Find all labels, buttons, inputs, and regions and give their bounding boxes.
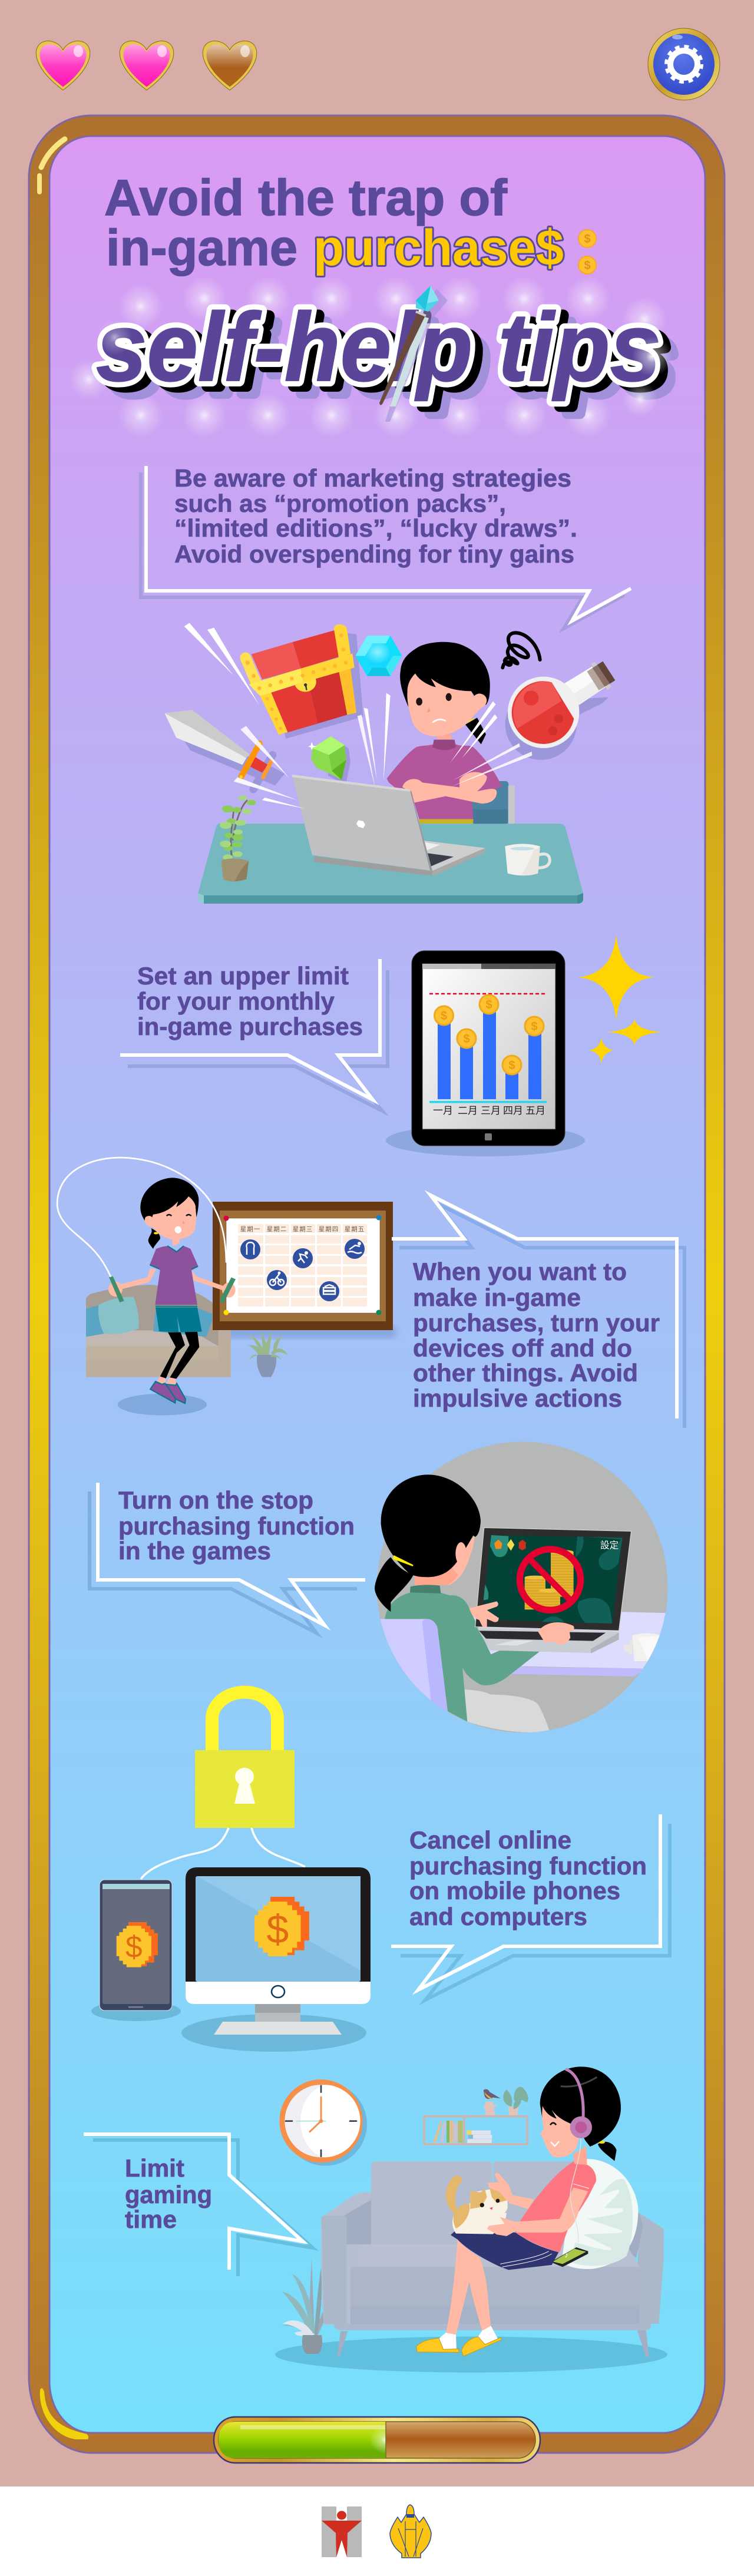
floor shadow — [275, 2336, 667, 2373]
scene: schedule board — [57, 1158, 396, 1416]
tip 2 text: Set an upper limit — [137, 962, 349, 990]
pixel coin large: $ — [266, 1907, 289, 1952]
icon: treasure chest — [246, 624, 363, 739]
life hearts — [36, 41, 257, 90]
icon: heart 2 — [120, 41, 174, 90]
icon: potted plant — [220, 795, 256, 882]
limit line — [429, 993, 547, 994]
weekday headers — [240, 1226, 365, 1233]
icon: heart 3 empty — [203, 41, 257, 90]
tip 3 text: purchases, turn your — [413, 1309, 660, 1337]
tip 6 text: time — [125, 2205, 177, 2233]
heading: self-help tips: self-help tips — [111, 305, 676, 414]
shirt — [515, 2161, 596, 2252]
tip 4 text: Turn on the stop — [118, 1486, 313, 1514]
tablet bar chart: $ — [441, 1010, 447, 1023]
heading word purchase$: purchase$ — [313, 220, 564, 276]
burst rays — [184, 623, 532, 809]
tip 3 text: other things. Avoid — [413, 1359, 638, 1387]
tip 1 text — [174, 464, 577, 568]
tip 3 text: impulsive actions — [413, 1384, 622, 1412]
shorts — [451, 2231, 558, 2270]
weekday headers: 星期二 — [267, 1226, 287, 1233]
month labels: 三月 — [481, 1105, 501, 1116]
green fill — [219, 2422, 386, 2458]
coin stacks — [551, 1552, 574, 1597]
tip 4 text — [118, 1486, 355, 1565]
coins — [435, 995, 544, 1074]
title — [104, 170, 564, 276]
tip 4 text: purchasing function — [118, 1512, 355, 1540]
icon: coin colon: $ — [584, 233, 591, 246]
icon: padlock with wires — [141, 1692, 305, 1879]
icon: blue gem — [355, 636, 402, 676]
heading line 1: Avoid the trap of — [104, 170, 507, 226]
month labels: 五月 — [525, 1105, 545, 1116]
tip 2 text: in-game purchases — [137, 1013, 363, 1040]
icon: mobile phone with coin — [91, 1880, 181, 2021]
sofa background — [86, 1285, 231, 1377]
weekday headers: 星期一 — [240, 1226, 260, 1233]
icon: red potion flask — [505, 662, 615, 760]
pixel coin small: $ — [125, 1929, 143, 1963]
icon: decorative plant — [281, 2257, 334, 2354]
month labels: 一月 — [433, 1105, 453, 1116]
tip 1 text: such as “promotion packs”, — [174, 490, 506, 517]
tip 1 speech bubble — [141, 466, 631, 629]
footer band — [0, 2486, 754, 2576]
icon: wall clock — [279, 2079, 367, 2166]
tip 6 text: Limit — [125, 2154, 184, 2182]
pixel coin large — [254, 1897, 309, 1956]
cat — [446, 2175, 462, 2214]
month labels — [433, 1105, 545, 1116]
room circle — [371, 1437, 677, 1744]
icon: floor plant — [246, 1330, 288, 1377]
tip 6 text — [125, 2154, 212, 2233]
tip 1 text: Avoid overspending for tiny gains — [174, 540, 574, 568]
month labels: 四月 — [503, 1105, 523, 1116]
icon: settings gear button — [648, 28, 720, 100]
headphones — [566, 2069, 583, 2118]
phone — [551, 2247, 588, 2267]
tip 1 text: Be aware of marketing strategies — [174, 464, 571, 492]
tip 3 text — [413, 1258, 660, 1412]
heading: self-help tips: self-help tips — [104, 298, 669, 406]
desk — [199, 824, 583, 904]
weekday headers: 星期四 — [319, 1226, 339, 1233]
girl with cat on sofa: ♪ — [564, 2251, 568, 2260]
neck and head — [573, 2146, 587, 2165]
logo: red figure — [322, 2506, 362, 2557]
tip 6 speech bubble — [84, 2134, 313, 2276]
icon: heart 1 — [36, 41, 90, 90]
tip 5 text — [409, 1826, 647, 1930]
icon: sword — [164, 710, 285, 789]
tablet bar chart: $ — [531, 1020, 538, 1033]
tip 3 text: devices off and do — [413, 1334, 632, 1362]
activity icons — [240, 1239, 365, 1301]
icon: wall shelf — [424, 2087, 528, 2144]
tip 5 speech bubble — [391, 1814, 670, 2000]
tip 6 text: gaming — [125, 2181, 212, 2208]
legs — [446, 2240, 491, 2334]
tablet bar chart: $ — [463, 1033, 470, 1046]
tip 1 text: “limited editions”, “lucky draws”. — [174, 514, 577, 542]
tip 5 text: Cancel online — [409, 1826, 571, 1854]
tip 2 speech bubble — [120, 959, 388, 1111]
icon: coin colon — [578, 230, 596, 274]
tip 4 text: in the games — [118, 1537, 271, 1565]
tip 3 text: When you want to — [413, 1258, 627, 1285]
settings label: 設定 — [600, 1540, 619, 1550]
progress bar — [214, 2417, 540, 2463]
prohibition sign — [520, 1549, 581, 1610]
glow dots behind heading — [69, 276, 667, 438]
scene: girl disables game purchases — [371, 1437, 677, 1744]
logo: hands emblem — [390, 2505, 431, 2558]
heading: self-help tips: self-help tips — [96, 293, 661, 401]
tablet bar chart: $ — [485, 998, 492, 1011]
pillow — [561, 2159, 638, 2269]
icon: coffee cup — [505, 844, 550, 875]
heading line 2: in-game — [106, 220, 297, 276]
weekday headers: 星期三 — [293, 1226, 313, 1233]
tip 5 text: on mobile phones — [409, 1877, 620, 1904]
icon: coin colon: $ — [584, 259, 591, 272]
tip 5 text: purchasing function — [409, 1852, 647, 1880]
girl from behind — [375, 1474, 574, 1645]
tip 2 text: for your monthly — [137, 987, 335, 1015]
schedule grid — [238, 1224, 367, 1307]
weekday headers: 星期五 — [345, 1226, 365, 1233]
icon: desktop monitor with coin — [181, 1867, 371, 2052]
heading: self-help tips: self-help tips — [96, 293, 661, 401]
tip 3 text: make in-game — [413, 1284, 581, 1311]
cork board — [213, 1202, 393, 1330]
tip 2 text — [137, 962, 363, 1040]
girl skipping rope — [57, 1158, 236, 1416]
girl with cat on sofa — [416, 2066, 638, 2356]
icon: yellow sparkles — [578, 934, 662, 1063]
icon: laptop back — [292, 775, 485, 876]
icon: magic wand — [379, 286, 448, 422]
tip 4 speech bubble — [90, 1483, 365, 1633]
tablet bar chart: $ — [508, 1059, 515, 1072]
tip 3 speech bubble — [392, 1195, 684, 1428]
month labels: 二月 — [458, 1105, 478, 1116]
pixel coin small — [117, 1922, 158, 1967]
icon: frustration squiggle — [502, 633, 540, 667]
icon: green crystal — [308, 736, 350, 785]
tablet bar chart — [386, 951, 585, 1156]
laptop with blocked coins — [475, 1527, 631, 1654]
tip 5 text: and computers — [409, 1903, 587, 1930]
scene: frustrated girl at laptop — [164, 623, 615, 904]
sofa — [321, 2161, 664, 2357]
bars — [438, 1011, 541, 1099]
person and chair — [387, 642, 515, 824]
